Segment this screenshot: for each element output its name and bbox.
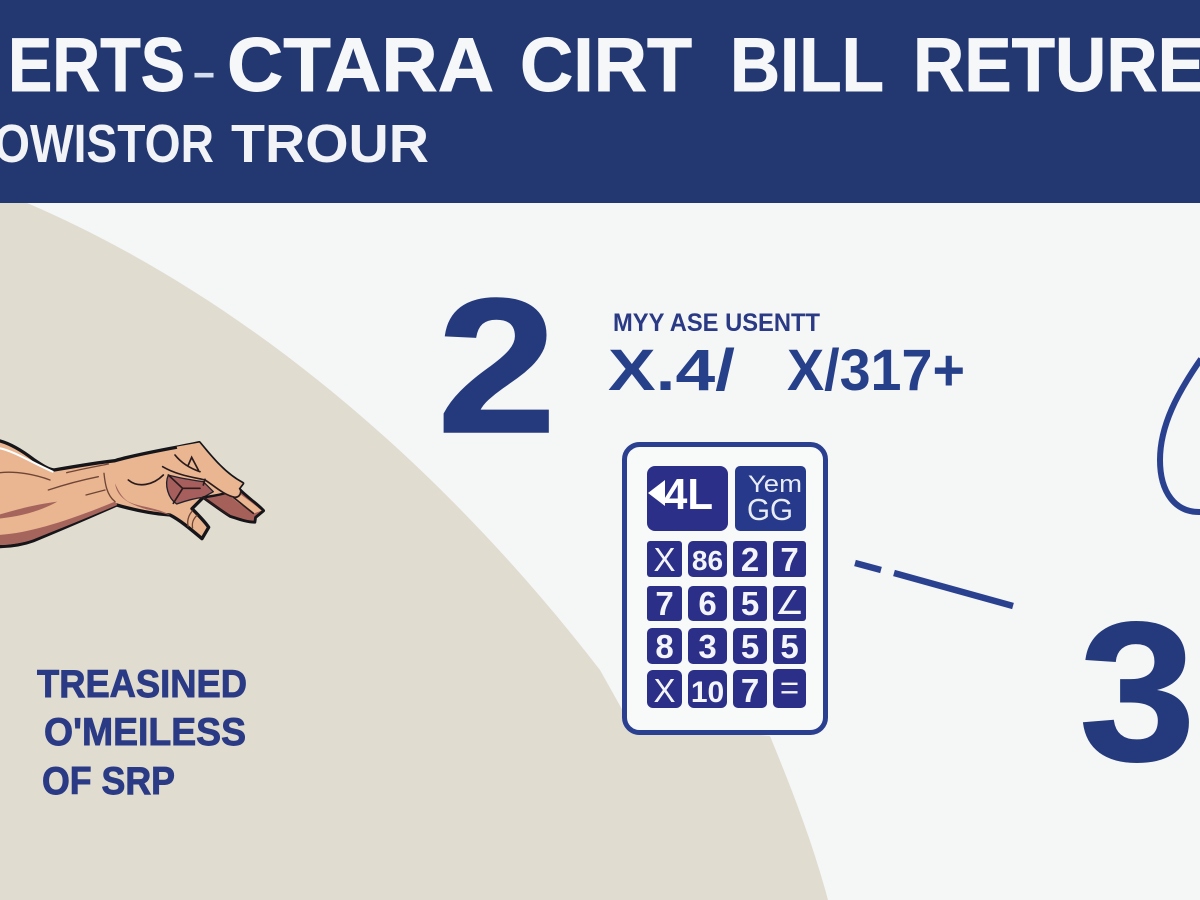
upper finger — [163, 443, 243, 497]
calculator keypad: 6 — [698, 585, 717, 622]
calculator keypad: 7 — [741, 672, 759, 709]
header band — [0, 0, 1200, 203]
forearm lines — [0, 464, 115, 502]
calculator keypad — [647, 541, 806, 709]
title: CIRT — [520, 23, 692, 108]
thumb nail — [188, 511, 197, 528]
step number 3: 3 — [1079, 581, 1196, 803]
calculator display right: Yem — [748, 471, 802, 498]
arrow: dashed connector — [855, 563, 1013, 606]
title — [8, 23, 1200, 108]
calculator keypad: 10 — [691, 676, 724, 709]
hand silhouette — [0, 440, 263, 547]
calculator keypad: 7 — [780, 541, 799, 578]
beige curved panel — [0, 203, 828, 900]
calculator display left: 4L — [664, 470, 713, 519]
calculator keypad: 5 — [741, 628, 759, 665]
calculator keypad: 3 — [698, 628, 717, 665]
title: BILL — [730, 23, 884, 108]
calculator keypad: 2 — [741, 541, 759, 578]
calculator keypad: 5 — [780, 628, 799, 665]
lower arm shadow — [0, 502, 117, 545]
caption text: TREASINED — [37, 663, 247, 706]
subtitle: TROUR — [231, 114, 429, 174]
calculator display right: GG — [747, 492, 793, 527]
middle finger highlight — [232, 494, 262, 513]
calculator keypad: 8 — [655, 628, 674, 665]
forearm highlight — [0, 448, 53, 472]
formula text: X.4/ — [608, 338, 735, 403]
calculator keypad: X — [653, 672, 676, 709]
caption text — [37, 663, 247, 803]
icon: partial oval outline — [1160, 359, 1200, 512]
step heading: MYY ASE USENTT — [613, 309, 820, 337]
finger outlines and creases — [128, 455, 253, 515]
title: CTARA — [227, 23, 494, 108]
calculator body — [624, 444, 826, 732]
subtitle — [0, 114, 429, 174]
step number 2: 2 — [437, 259, 557, 473]
calculator keypad: X — [653, 541, 676, 578]
forearm crease shadow — [0, 502, 57, 519]
formula text: X/317+ — [787, 338, 965, 403]
calculator keypad: ∠ — [775, 584, 804, 621]
calculator keypad: 5 — [741, 585, 759, 622]
calculator keypad: = — [780, 669, 799, 706]
calculator display right — [735, 466, 806, 531]
lower fingers — [203, 489, 263, 522]
wrist crease shadow — [115, 483, 170, 515]
palm cavity — [167, 475, 213, 504]
calculator keypad: 86 — [692, 545, 723, 576]
caption text: OF SRP — [42, 760, 175, 803]
formula text — [608, 338, 965, 403]
subtitle: OWISTOR — [0, 114, 214, 174]
icon: reaching hand — [0, 440, 263, 547]
title: ERTS — [8, 23, 185, 108]
caption text: O'MEILESS — [44, 711, 246, 754]
icon: calculator — [624, 444, 826, 732]
title: - — [191, 39, 217, 104]
calculator display left — [647, 466, 728, 531]
calculator keypad: 7 — [655, 585, 674, 622]
